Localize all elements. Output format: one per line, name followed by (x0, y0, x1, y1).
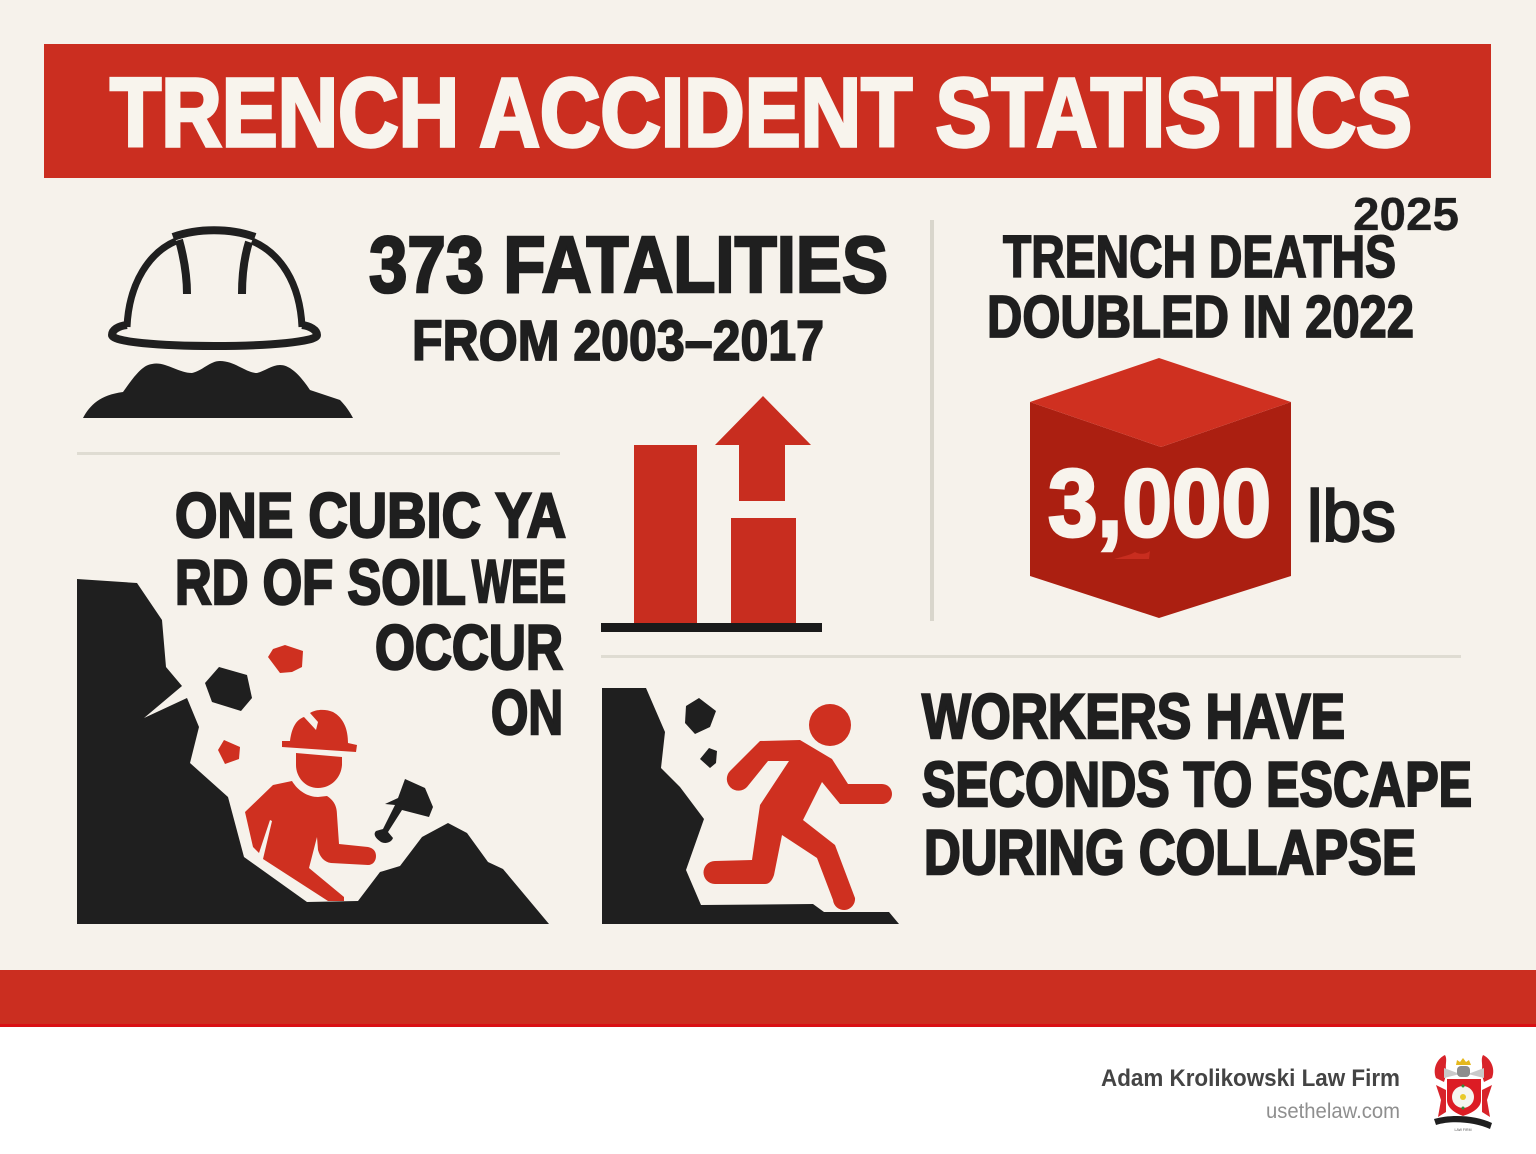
stat: deaths doubled (987, 188, 1459, 350)
icon: hard hat on soil (83, 230, 353, 418)
stat: one cubic yard of soil: ONE CUBIC YA (175, 481, 566, 551)
stat: one cubic yard of soil: WEE (472, 548, 566, 615)
stat: seconds to escape (922, 682, 1472, 888)
stat: one cubic yard of soil: OCCUR (375, 613, 563, 683)
icon: soil cube with weight (1030, 358, 1291, 618)
icon: soil cube with weight: 3,000 (1048, 450, 1271, 557)
footer firm name: Adam Krolikowski Law Firm (1101, 1065, 1400, 1092)
stat: one cubic yard of soil: RD OF SOIL (175, 548, 466, 618)
stat: one cubic yard of soil (175, 481, 566, 748)
icon: worker buried by soil (77, 579, 549, 924)
stat: 373 fatalities: 373 FATALITIES (369, 220, 888, 309)
stat: 373 fatalities: FROM 2003–2017 (412, 309, 824, 373)
stat: one cubic yard of soil: ON (491, 678, 563, 748)
stat: seconds to escape: WORKERS HAVE (922, 682, 1345, 752)
logo: Krolikowski crest (1434, 1055, 1493, 1132)
stat: 373 fatalities (369, 220, 888, 373)
icon: rising bar chart with arrow (601, 396, 822, 632)
stat: deaths doubled: TRENCH DEATHS (1003, 224, 1396, 290)
stat: deaths doubled: DOUBLED IN 2022 (987, 284, 1414, 350)
stat: seconds to escape: DURING COLLAPSE (924, 818, 1416, 888)
weight unit: lbs (1307, 477, 1396, 557)
icon: worker running from collapse (602, 688, 899, 924)
stat: deaths doubled: 2025 (1353, 188, 1459, 240)
footer website: usethelaw.com (1266, 1100, 1400, 1123)
red footer band (0, 970, 1536, 1027)
logo: Krolikowski crest: LAW FIRM (1455, 1128, 1472, 1132)
